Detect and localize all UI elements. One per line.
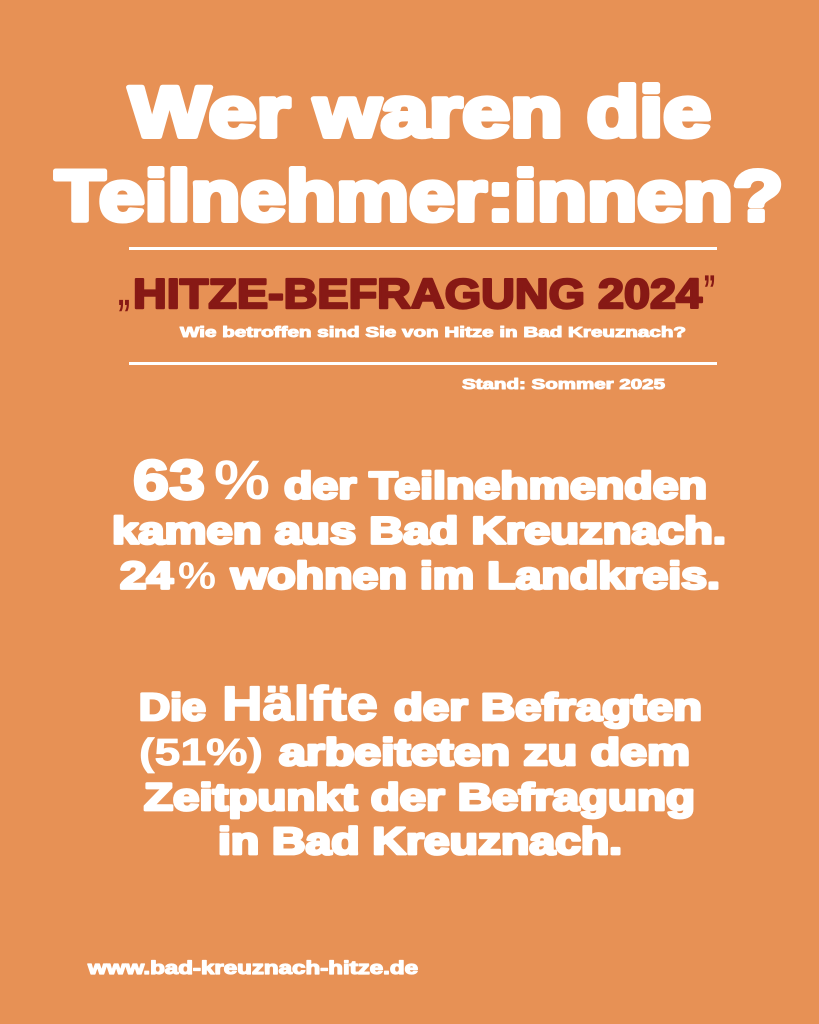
text block: workplace of respondents: (51%)	[139, 732, 263, 774]
text block: workplace of respondents: arbeiteten zu dem	[279, 732, 690, 774]
text block: workplace of respondents	[139, 678, 702, 863]
text block: origin of participants: wohnen im Landkreis.	[230, 556, 720, 598]
text block: origin of participants: %	[178, 556, 216, 598]
website url: www.bad-kreuznach-hitze.de	[87, 958, 418, 978]
text block: workplace of respondents: in Bad Kreuznach.	[218, 821, 622, 863]
text block: workplace of respondents: Zeitpunkt der Befragung	[144, 777, 695, 819]
date note: Stand: Sommer 2025	[462, 376, 665, 393]
heading: Hitze-Befragung 2024: „	[117, 270, 131, 314]
text block: workplace of respondents: Die	[139, 687, 206, 729]
title	[55, 74, 783, 236]
title: Wer waren die	[129, 74, 711, 152]
text block: origin of participants	[112, 448, 726, 598]
heading: Hitze-Befragung 2024: HITZE-BEFRAGUNG 2024	[133, 270, 703, 317]
text block: origin of participants: 24	[120, 556, 173, 598]
title: Teilnehmer:innen?	[55, 158, 783, 236]
text block: workplace of respondents: der Befragten	[394, 687, 702, 729]
text block: origin of participants: kamen aus Bad Kreuznach.	[112, 510, 726, 552]
text block: workplace of respondents: Hälfte	[222, 678, 378, 731]
heading: Hitze-Befragung 2024: ”	[703, 268, 716, 312]
text block: origin of participants: 63	[133, 448, 205, 511]
subtitle: Wie betroffen sind Sie von Hitze in Bad Kreuznach?	[180, 325, 686, 341]
text block: origin of participants: %	[214, 448, 270, 511]
text block: origin of participants: der Teilnehmenden	[284, 466, 707, 508]
